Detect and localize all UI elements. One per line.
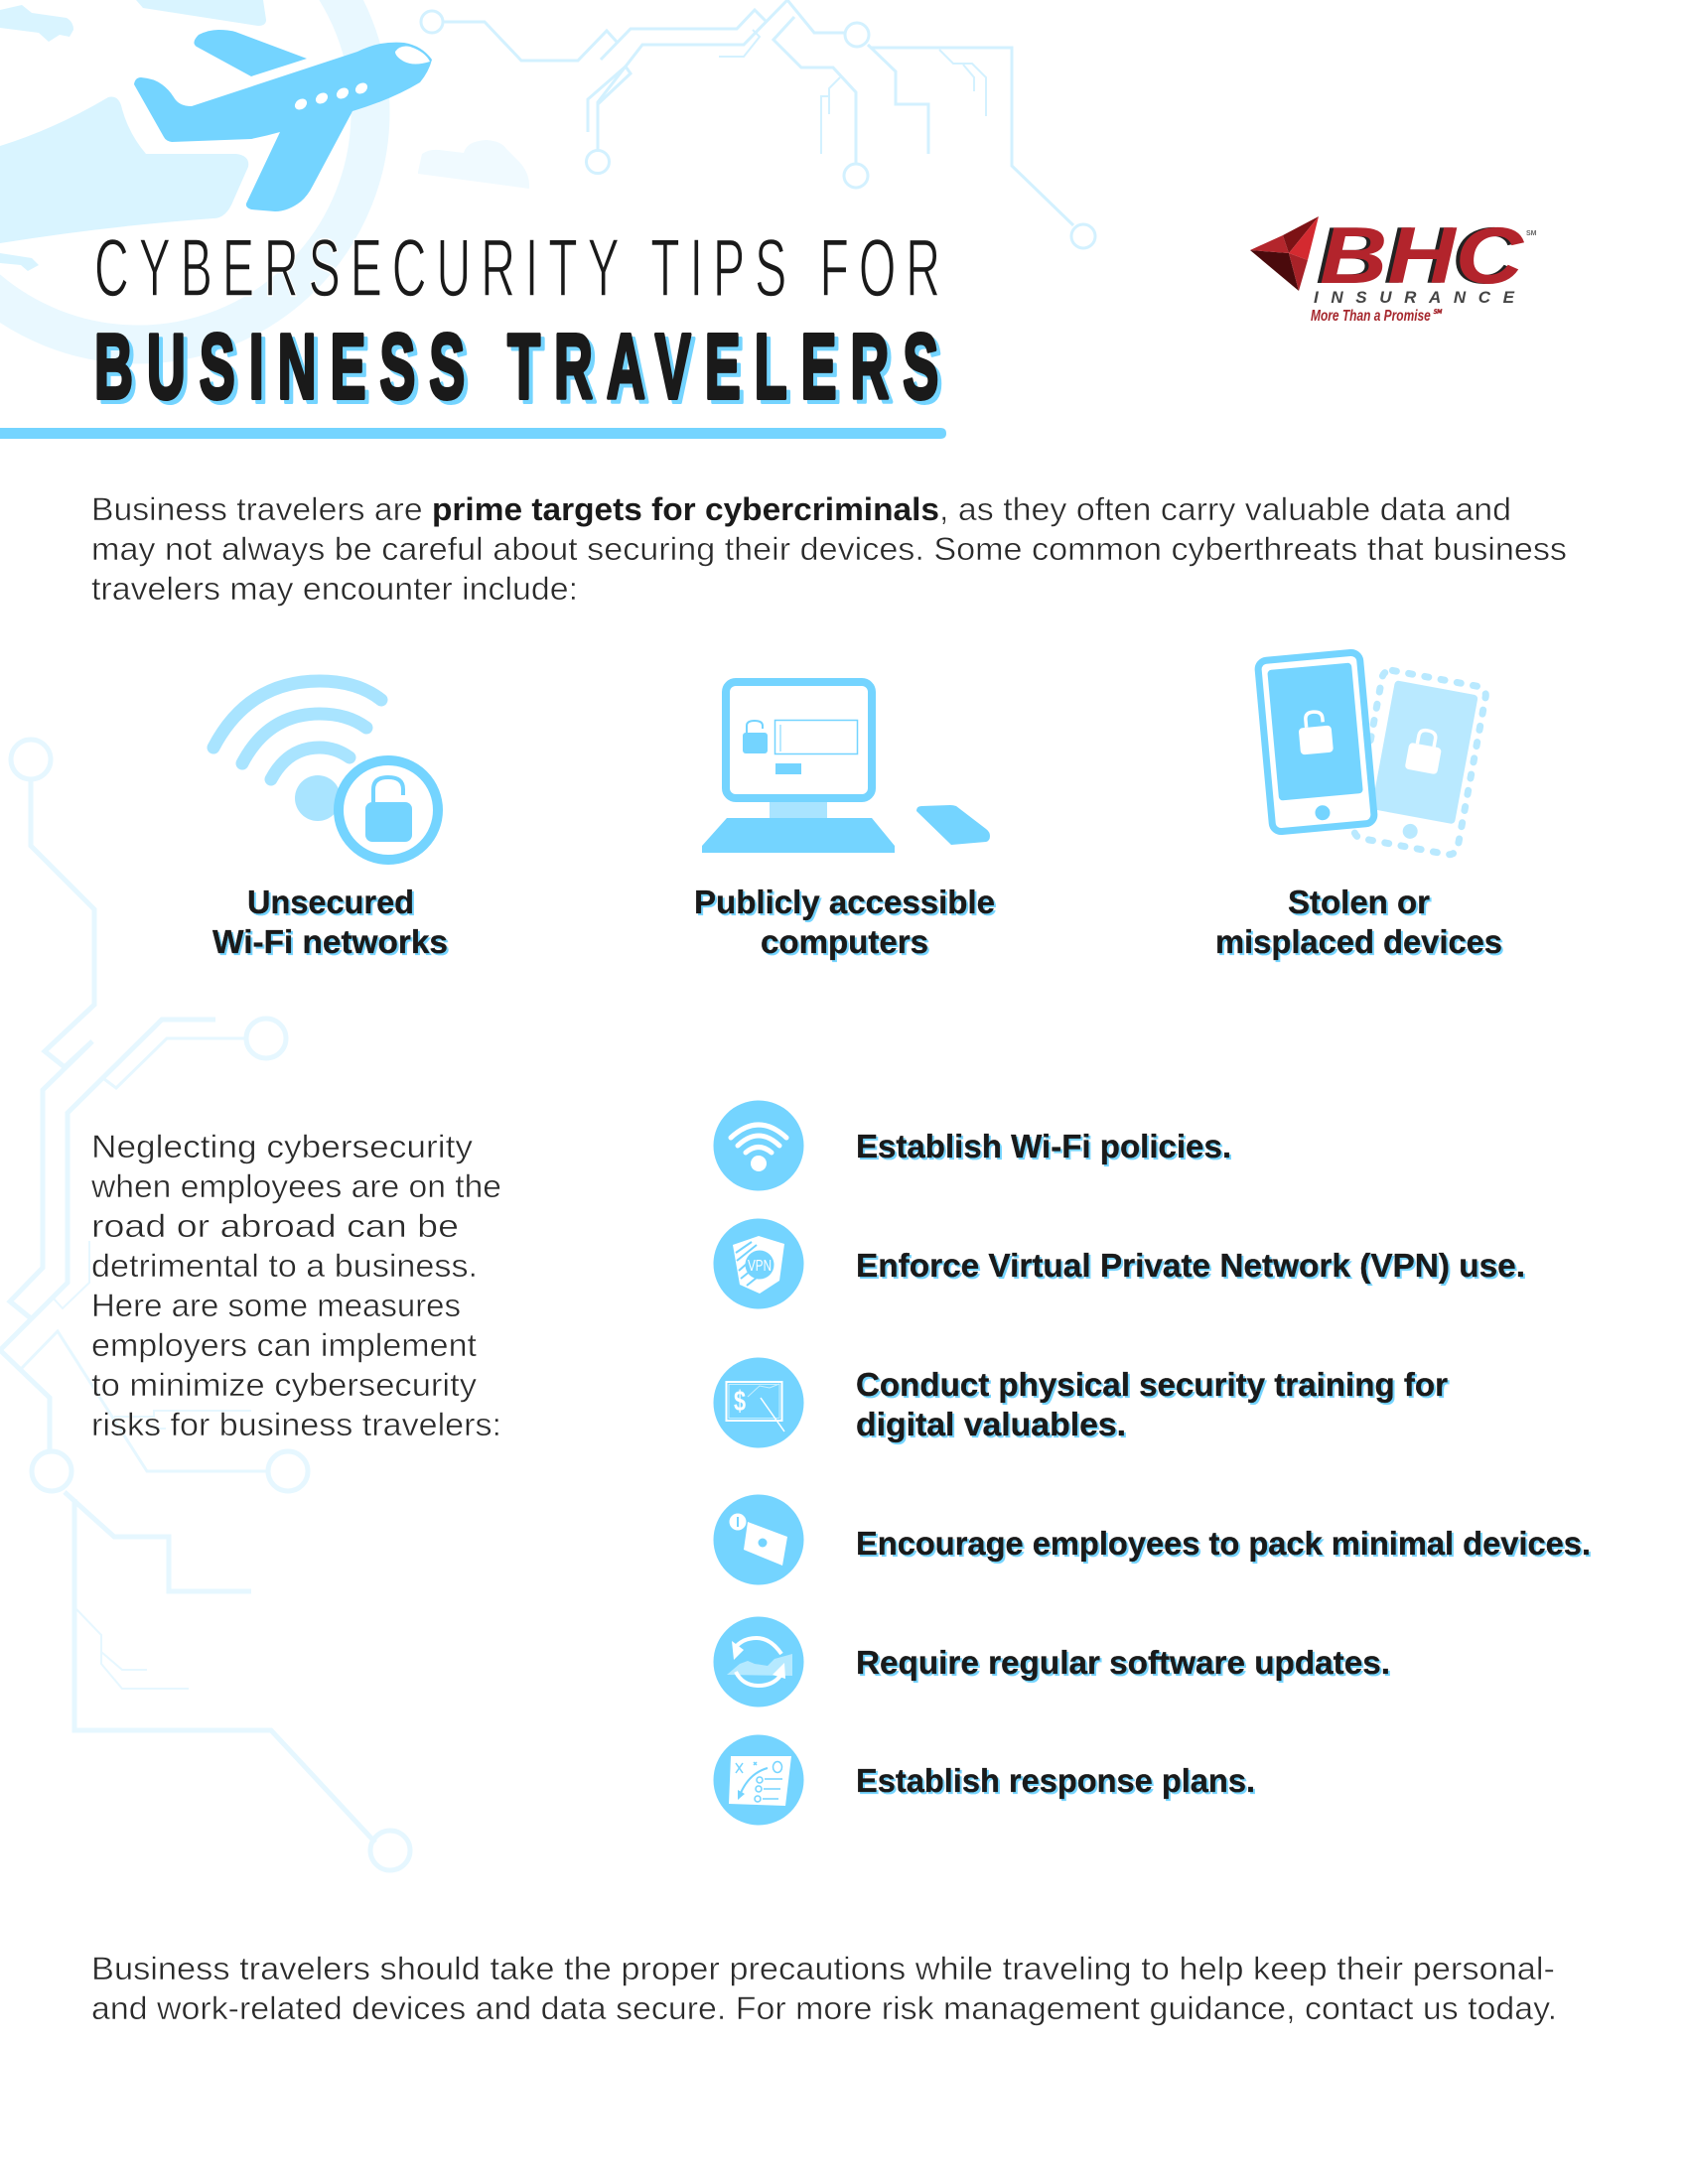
circuit lines: left — [0, 740, 410, 1870]
title underline — [0, 428, 946, 439]
icon: response plan — [713, 1735, 804, 1825]
tip 6 — [713, 1735, 1255, 1825]
tip text: Require regular software updates. — [856, 1644, 1390, 1681]
tip text: Establish Wi-Fi policies. — [856, 1128, 1231, 1164]
logo: BHC Insurance: BHC — [1316, 211, 1521, 301]
logo: BHC Insurance: SM — [1526, 230, 1537, 237]
threat: unsecured Wi-Fi — [212, 681, 448, 960]
intro paragraph: travelers may encounter include: — [91, 571, 578, 607]
tip 4 — [713, 1495, 1591, 1584]
tip text — [856, 1366, 1448, 1442]
tip text: Conduct physical security training for — [856, 1366, 1448, 1403]
intro paragraph: , as they often carry valuable data and — [939, 491, 1511, 527]
tip text: Establish response plans. — [856, 1762, 1255, 1799]
circuit lines: top — [421, 0, 1095, 248]
threat: public computers — [694, 682, 995, 960]
icon: VPN shield: VPN — [748, 1258, 772, 1275]
closing paragraph: Business travelers should take the proper precautions while traveling to help keep their personal- — [91, 1951, 1555, 1986]
icon: desktop computer — [702, 682, 990, 853]
label: Stolen or — [1288, 884, 1430, 920]
icon: VPN shield — [713, 1219, 804, 1308]
label — [212, 884, 448, 960]
closing paragraph — [91, 1951, 1557, 2026]
icon: phones — [1257, 652, 1487, 856]
airplane illustration — [134, 30, 432, 211]
threat: stolen devices — [1215, 652, 1502, 960]
measures paragraph: Here are some measures — [91, 1288, 461, 1323]
tip text: Enforce Virtual Private Network (VPN) use. — [856, 1247, 1525, 1284]
measures paragraph: road or abroad can be — [91, 1208, 459, 1244]
tip 1 — [713, 1100, 1231, 1191]
icon: wifi — [713, 1100, 804, 1191]
icon: dollar board — [713, 1358, 804, 1447]
tip text: Encourage employees to pack minimal devices. — [856, 1525, 1591, 1562]
label: misplaced devices — [1215, 923, 1502, 960]
icon: software update — [713, 1616, 804, 1707]
label: Wi-Fi networks — [212, 923, 448, 960]
measures paragraph — [90, 1129, 501, 1442]
measures paragraph: Neglecting cybersecurity — [91, 1129, 473, 1164]
label — [1215, 884, 1502, 960]
intro paragraph: prime targets for cybercriminals — [432, 491, 939, 527]
logo: BHC Insurance: More Than a Promise℠ — [1311, 308, 1443, 325]
measures paragraph: to minimize cybersecurity — [91, 1367, 477, 1403]
globe background — [0, 0, 370, 344]
title: line 2: BUSINESS TRAVELERS — [94, 316, 938, 419]
logo: BHC Insurance: INSURANCE — [1314, 288, 1515, 307]
measures paragraph: employers can implement — [91, 1327, 477, 1363]
closing paragraph: and work-related devices and data secure. For more risk management guidance, contact us today. — [91, 1990, 1557, 2026]
label: Publicly accessible — [694, 884, 995, 920]
tip text: digital valuables. — [856, 1406, 1126, 1442]
icon: wifi with open lock — [213, 681, 438, 860]
icon: dollar board: $ — [734, 1386, 746, 1418]
icon: minimal device — [713, 1495, 804, 1584]
tip 5 — [713, 1616, 1390, 1707]
logo: BHC Insurance — [1250, 211, 1537, 325]
label — [694, 884, 995, 960]
label: Unsecured — [247, 884, 414, 920]
cloud — [418, 140, 529, 189]
tip 3 — [713, 1358, 1448, 1447]
label: computers — [761, 923, 928, 960]
logo: BHC Insurance: BHC — [1320, 211, 1525, 301]
intro paragraph — [91, 491, 1567, 607]
intro paragraph: may not always be careful about securing their devices. Some common cyberthreats that business — [91, 531, 1567, 567]
measures paragraph: detrimental to a business. — [91, 1248, 478, 1284]
intro paragraph: Business travelers are — [91, 491, 432, 527]
measures paragraph: risks for business travelers: — [91, 1407, 501, 1442]
title: line 1: CYBERSECURITY TIPS FOR — [94, 223, 940, 314]
tip 2 — [713, 1219, 1525, 1308]
measures paragraph: when employees are on the — [90, 1168, 501, 1204]
